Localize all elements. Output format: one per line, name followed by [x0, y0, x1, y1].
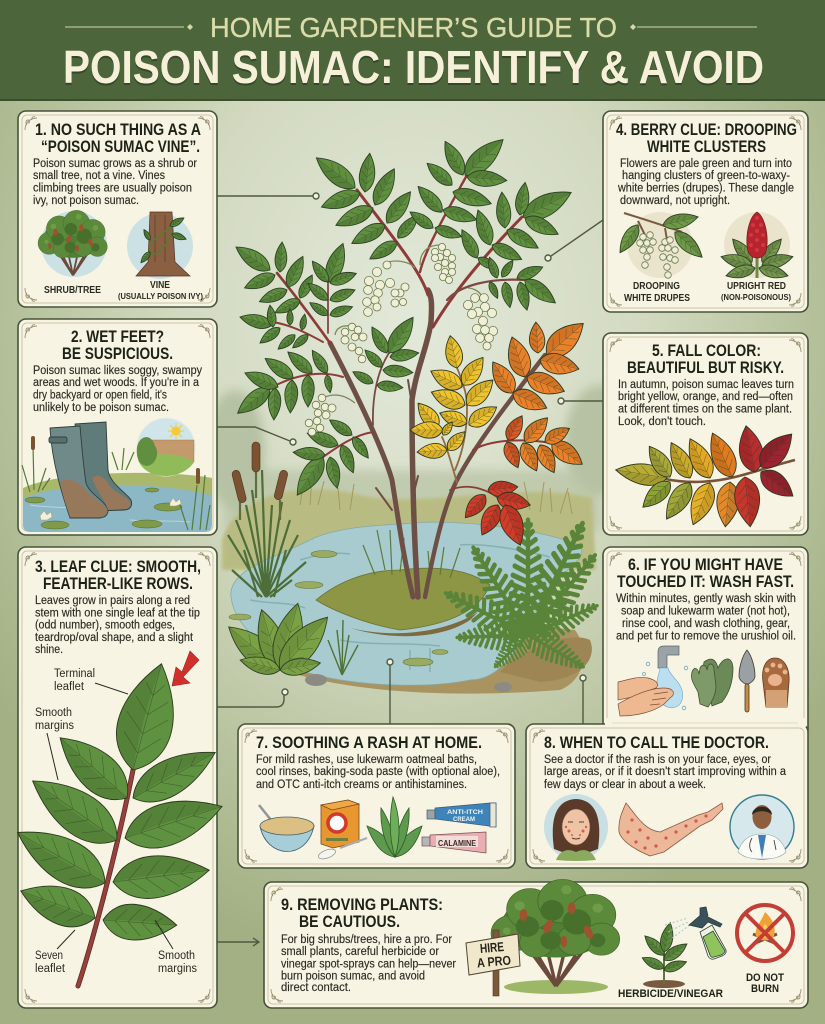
- sprayer bottle: [689, 907, 726, 959]
- body text: few days or clear in about a week.: [544, 779, 706, 791]
- body text: cool rinses, baking-soda paste (with optional aloe),: [256, 766, 500, 778]
- berry clusters: [305, 243, 498, 436]
- body text: at different times on the same plant.: [618, 404, 792, 416]
- body text: In autumn, poison sumac leaves turn: [618, 379, 794, 391]
- body text: unlikely to be poison sumac.: [33, 402, 169, 414]
- reeds and cattails: [228, 470, 306, 597]
- body text: small plants, careful herbicide or: [281, 946, 439, 958]
- body text: [256, 754, 500, 791]
- small grass clump: [328, 620, 358, 675]
- icon: calamine tube: [422, 832, 486, 853]
- panel 7: soothing a rash: [238, 724, 515, 868]
- body text: and pet fur to remove the urushiol oil.: [616, 630, 796, 642]
- heading: [627, 342, 784, 377]
- icon labels: UPRIGHT RED: [727, 281, 786, 292]
- leaf annotations: [35, 668, 197, 975]
- leaf annotations: leaflet: [54, 681, 85, 693]
- body text: dry backyard or open field, it's: [33, 390, 167, 402]
- icon: aloe plant: [367, 797, 422, 857]
- icon labels: SHRUB/TREE: [44, 285, 101, 296]
- title line 1: HOME GARDENER’S GUIDE TO: [210, 12, 617, 43]
- icon labels: [618, 972, 784, 1000]
- leaf annotations: margins: [35, 720, 74, 732]
- fern soil: [500, 637, 592, 682]
- heading: 7. SOOTHING A RASH AT HOME.: [256, 734, 482, 752]
- panel 2: wet feet: [18, 319, 217, 535]
- heading: [62, 328, 173, 363]
- icon: shrub: [38, 210, 107, 277]
- body text: [281, 934, 456, 994]
- leaf annotations: Smooth: [158, 950, 195, 962]
- icon: dry backyard circle: [137, 418, 195, 476]
- body text: small tree, not a vine. Vines: [33, 170, 165, 182]
- icon labels: DROOPING: [633, 281, 680, 292]
- icon: drooping white drupes: [615, 210, 707, 278]
- icon: woman with facial rash: [544, 794, 608, 861]
- island: [316, 568, 490, 630]
- body text: Look, don't touch.: [618, 416, 706, 428]
- icon: rubber boots: [49, 422, 132, 518]
- body text: hanging clusters of green-to-waxy-: [622, 170, 790, 182]
- leaf annotations: Seven: [35, 950, 63, 962]
- body text: (odd number), smooth edges,: [35, 620, 175, 632]
- yellow leaves: [410, 334, 501, 460]
- icon labels: BURN: [751, 983, 779, 995]
- icon: large shrub: [491, 879, 620, 994]
- body text: [35, 595, 200, 656]
- orange leaves: [485, 315, 591, 476]
- heading: FEATHER-LIKE ROWS.: [43, 575, 193, 593]
- body text: Leaves grow in pairs along a red: [35, 595, 190, 607]
- icon: hand trowel: [739, 650, 755, 712]
- body text: soap and lukewarm water (not hot),: [621, 606, 790, 618]
- heading: BEAUTIFUL BUT RISKY.: [627, 359, 784, 377]
- panel 1: no poison sumac vine: [18, 111, 217, 307]
- body text: Flowers are pale green and turn into: [620, 158, 792, 170]
- left plant: [220, 600, 338, 680]
- heading: [281, 896, 443, 931]
- body text: [616, 593, 796, 642]
- leaf annotations: Smooth: [35, 707, 72, 719]
- body text: [618, 379, 794, 428]
- icon labels: VINE: [150, 280, 170, 291]
- icon labels: [44, 280, 203, 301]
- body text: [617, 158, 794, 207]
- heading: TOUCHED IT: WASH FAST.: [617, 573, 794, 591]
- red leaves: [460, 479, 532, 549]
- body text: stem with one single leaf at the tip: [35, 608, 200, 620]
- icon: hire a pro sign: [466, 930, 520, 996]
- body text: Poison sumac likes soggy, swampy: [33, 365, 202, 377]
- body text: large areas, or if it doesn't start improving within a: [544, 766, 787, 778]
- heading: [35, 558, 201, 593]
- body text: Within minutes, gently wash skin with: [616, 593, 796, 605]
- panel 4: berry clue: [603, 111, 808, 312]
- icon: anti-itch cream tube: CREAM: [453, 817, 475, 823]
- heading: “POISON SUMAC VINE”.: [41, 138, 200, 156]
- icon: anti-itch cream tube: [427, 803, 496, 827]
- trunks and branches: [270, 175, 552, 597]
- right fern: [439, 515, 607, 678]
- icon labels: (NON-POISONOUS): [721, 292, 791, 302]
- body text: shine.: [35, 644, 63, 656]
- leaf annotations: Terminal: [54, 668, 95, 680]
- body text: For big shrubs/trees, hire a pro. For: [281, 934, 452, 946]
- icon: spoon: [317, 838, 367, 861]
- body text: rinse cool, and wash clothing, gear,: [622, 618, 790, 630]
- heading: 6. IF YOU MIGHT HAVE: [628, 556, 783, 574]
- icon labels: WHITE DRUPES: [624, 293, 690, 304]
- icon: washing hands at faucet: [618, 646, 688, 716]
- icon: small plant and sprayer: [640, 907, 726, 988]
- icon: autumn leaf spray: [614, 424, 800, 529]
- panel 3: leaf clue: [7, 547, 229, 1008]
- panel 5: fall color: [603, 333, 808, 535]
- pond: [231, 522, 582, 685]
- heading: [617, 556, 794, 591]
- icon: hire a pro sign: HIRE: [479, 939, 505, 956]
- body text: For mild rashes, use lukewarm oatmeal baths,: [256, 754, 477, 766]
- icon: arm with rash: [619, 803, 723, 856]
- heading: WHITE CLUSTERS: [647, 138, 766, 156]
- leaf annotations: margins: [158, 963, 197, 975]
- compound leaf diagram: [7, 657, 229, 986]
- icon: gardening gloves: [691, 659, 733, 707]
- body text: white berries (drupes). These dangle: [617, 182, 794, 194]
- icon: vine on tree: [127, 212, 193, 279]
- body text: climbing trees are usually poison: [33, 182, 192, 194]
- swamp strip: [22, 436, 212, 532]
- heading: 9. REMOVING PLANTS:: [281, 896, 443, 914]
- body text: [33, 158, 197, 207]
- body text: [33, 365, 202, 414]
- icon: hire a pro sign: A PRO: [476, 953, 512, 970]
- heading: 3. LEAF CLUE: SMOOTH,: [35, 558, 201, 576]
- icon: oatmeal bowl: [259, 805, 314, 852]
- icon: doctor: [730, 795, 794, 859]
- icon labels: DO NOT: [746, 972, 784, 984]
- body text: downward, not upright.: [620, 195, 730, 207]
- icon: calamine tube: CALAMINE: [438, 838, 476, 848]
- panel 6: wash fast: [603, 547, 808, 737]
- panel 9: removing plants: [264, 879, 808, 1008]
- heading: BE SUSPICIOUS.: [62, 345, 173, 363]
- body text: ivy, not poison sumac.: [33, 195, 139, 207]
- icon labels: [624, 281, 791, 304]
- leaf annotations: leaflet: [35, 963, 66, 975]
- callout lines: [217, 193, 603, 946]
- icon: do not burn: [737, 905, 793, 961]
- body text: burn poison sumac, and avoid: [281, 970, 425, 982]
- stones: [305, 674, 327, 686]
- body text: Poison sumac grows as a shrub or: [33, 158, 197, 170]
- heading: [35, 121, 201, 156]
- heading: [616, 121, 797, 156]
- heading: 8. WHEN TO CALL THE DOCTOR.: [544, 734, 769, 752]
- green leaves: [232, 132, 576, 500]
- body text: See a doctor if the rash is on your face, eyes, or: [544, 754, 771, 766]
- icon: baking soda box: [321, 800, 359, 848]
- header banner: [0, 0, 825, 101]
- central illustration: poison sumac tree: [232, 132, 591, 597]
- icon: dog paw: [763, 658, 789, 707]
- body text: direct contact.: [281, 982, 351, 994]
- body text: [544, 754, 787, 791]
- body text: vinegar spot-sprays can help—never: [281, 958, 456, 970]
- heading: BE CAUTIOUS.: [299, 913, 400, 931]
- icon labels: (USUALLY POISON IVY): [118, 291, 203, 301]
- swamp scene: [205, 385, 635, 694]
- icon labels: HERBICIDE/VINEGAR: [618, 988, 723, 1000]
- icon: red arrow: [172, 651, 199, 686]
- icon: anti-itch cream tube: ANTI-ITCH: [447, 810, 483, 816]
- body text: teardrop/oval shape, and a slight: [35, 632, 194, 644]
- heading: 1. NO SUCH THING AS A: [35, 121, 201, 139]
- body text: bright yellow, orange, and red—often: [618, 391, 793, 403]
- panel 8: when to call the doctor: [526, 718, 808, 868]
- icon: upright red sumac: [719, 212, 795, 281]
- heading: 2. WET FEET?: [71, 328, 164, 346]
- heading: 5. FALL COLOR:: [652, 342, 761, 360]
- body text: areas and wet woods. If you're in a: [33, 377, 200, 389]
- body text: and OTC anti-itch creams or antihistamines.: [256, 779, 467, 791]
